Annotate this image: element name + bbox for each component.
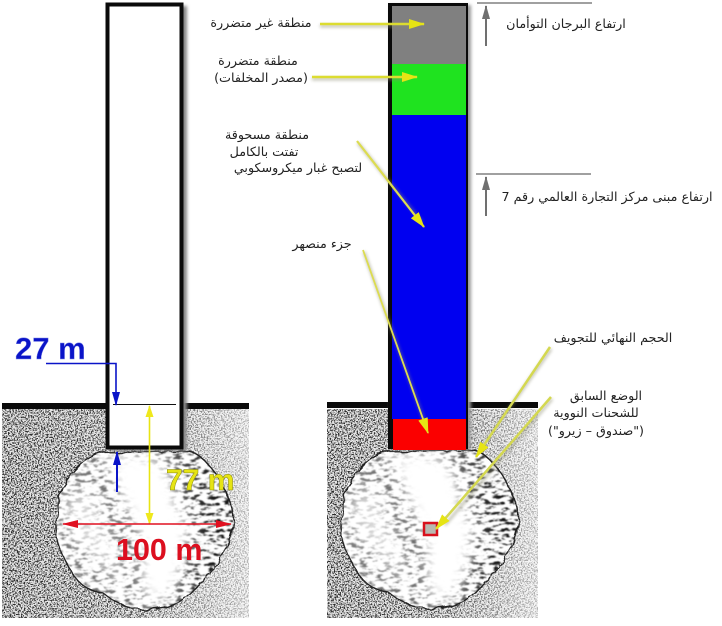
tower shadow and frame [388, 3, 471, 450]
text: undamaged zone: منطقة غير متضررة [210, 15, 312, 31]
arrow: blue up arrow [116, 452, 118, 492]
arrow: 100 m double arrow [63, 523, 231, 525]
text: pulverized zone: منطقة مسحوقة [225, 127, 309, 143]
arrow shadows [312, 26, 552, 525]
arrow: undamaged zone [320, 23, 424, 25]
text: pulverized zone: لتصبح غبار ميكروسكوبي [234, 160, 362, 176]
zone: undamaged [392, 6, 466, 64]
panel: left crater diagram [2, 4, 249, 618]
text: previous charge location [548, 388, 644, 439]
tower with zones [388, 3, 471, 450]
text: damaged zone: منطقة متضررة [218, 53, 298, 69]
zone: pulverized [392, 115, 466, 419]
text: previous charge location: الوضع السابق [570, 388, 642, 404]
arrow: 77 m double arrow [148, 406, 150, 524]
arrow: melted part [363, 250, 428, 433]
text: twin towers height: ارتفاع البرجان التوأمان [506, 15, 626, 32]
height marker: twin towers [477, 3, 592, 46]
text: damaged zone [214, 53, 308, 86]
label: 77 m: 77 m [166, 464, 234, 497]
arrow: damaged zone [312, 76, 417, 78]
text: damaged zone: (مصدر المخلفات) [214, 70, 308, 86]
arrow: pulverized zone [357, 141, 424, 227]
text: pulverized zone: تفتت بالكامل [230, 144, 299, 159]
label: 100 m: 100 m [116, 533, 202, 567]
ground surface line [2, 403, 249, 409]
panel: right crater diagram [327, 3, 538, 618]
cavity rock [55, 450, 236, 612]
tower outline [108, 4, 187, 451]
text: melted part: جزء منصهر [291, 236, 352, 252]
collapse level line [113, 404, 176, 406]
arrow: final cavity size [476, 347, 550, 457]
ground texture [327, 409, 538, 618]
text: previous charge location: ("صندوق – زيرو") [548, 423, 644, 439]
previous location of nuclear charge marker [424, 523, 437, 535]
height marker: WTC 7 [476, 174, 591, 216]
text: final cavity size: الحجم النهائي للتجويف [554, 330, 672, 346]
ground texture [2, 409, 249, 618]
ground surface line [327, 402, 538, 408]
label: 27 m: 27 m [15, 331, 86, 366]
arrow: 27 m pointer [46, 364, 116, 405]
arrow: charge location [436, 397, 551, 529]
text: pulverized zone [225, 127, 362, 176]
zone: melted [393, 419, 466, 450]
text: WTC 7 height: ارتفاع مبنى مركز التجارة العالمي رقم 7 [501, 189, 713, 205]
cavity rock [340, 448, 520, 611]
text: previous charge location: للشحنات النووية [553, 405, 639, 421]
zone: damaged [392, 64, 466, 115]
